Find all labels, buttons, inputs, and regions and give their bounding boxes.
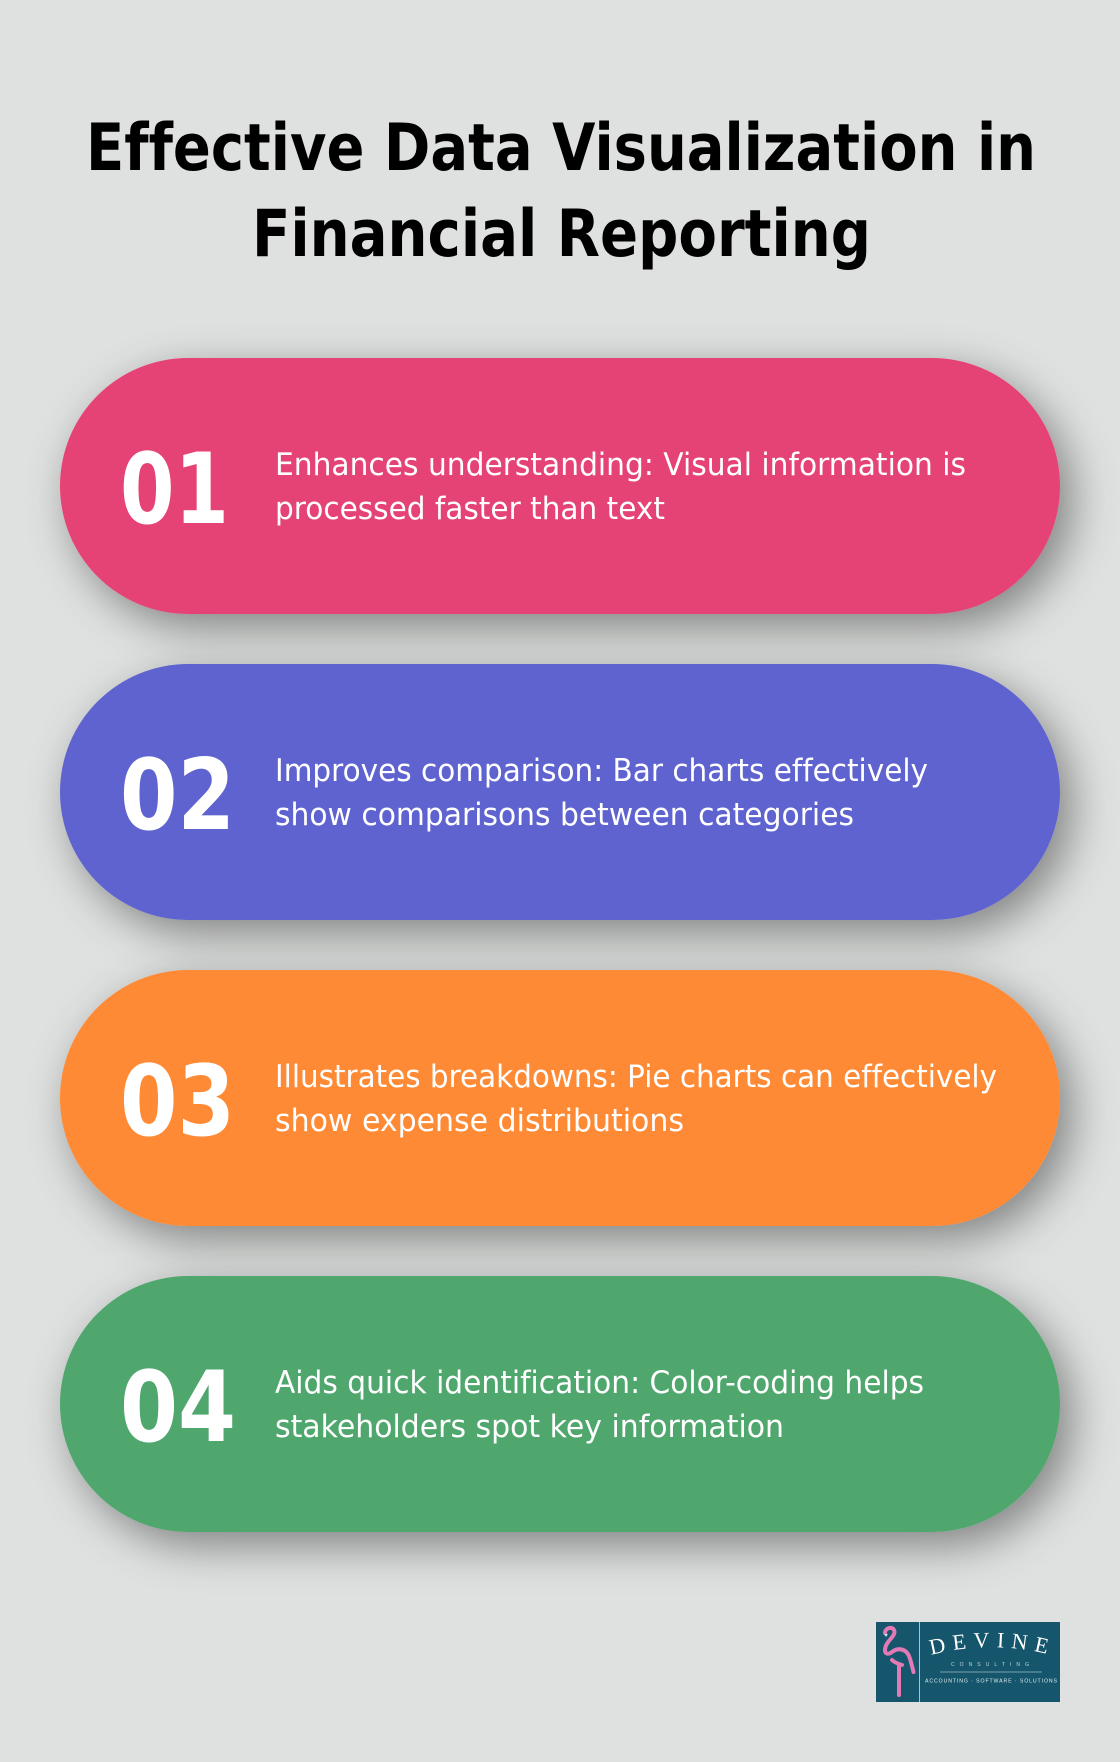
logo subtitle: CONSULTING [951,1662,1029,1668]
text 03: Illustrates breakdowns: Pie charts can effectively [275,1059,997,1095]
pill background 04 [60,1276,1060,1532]
text 03 [275,1059,997,1139]
logo wordmark: DEVINE [928,1632,1048,1655]
number 04: 04 [120,1351,236,1465]
text 03: show expense distributions [275,1103,684,1139]
text 02: Improves comparison: Bar charts effectively [275,753,928,789]
text 01: processed faster than text [275,491,665,527]
pill background 01 [60,358,1060,614]
text 04: stakeholders spot key information [275,1409,784,1445]
number 02: 02 [120,739,235,853]
pill background 03 [60,970,1060,1226]
text 04: Aids quick identification: Color-coding helps [275,1365,924,1401]
number 03: 03 [120,1045,235,1159]
logo tagline: ACCOUNTING · SOFTWARE · SOLUTIONS [925,1678,1058,1684]
title [86,111,1036,272]
panel: item 01 [60,358,1060,614]
text 02 [275,753,928,833]
logo: Devine Consulting [876,1622,1060,1702]
title: Financial Reporting [252,197,871,272]
number 01: 01 [120,433,229,547]
text 01: Enhances understanding: Visual information is [275,447,966,483]
icon: flamingo [884,1628,914,1695]
pill background 02 [60,664,1060,920]
text 01 [275,447,966,527]
panel: item 02 [60,664,1060,920]
panel: item 04 [60,1276,1060,1532]
panel: item 03 [60,970,1060,1226]
text 04 [275,1365,924,1445]
text 02: show comparisons between categories [275,797,854,833]
